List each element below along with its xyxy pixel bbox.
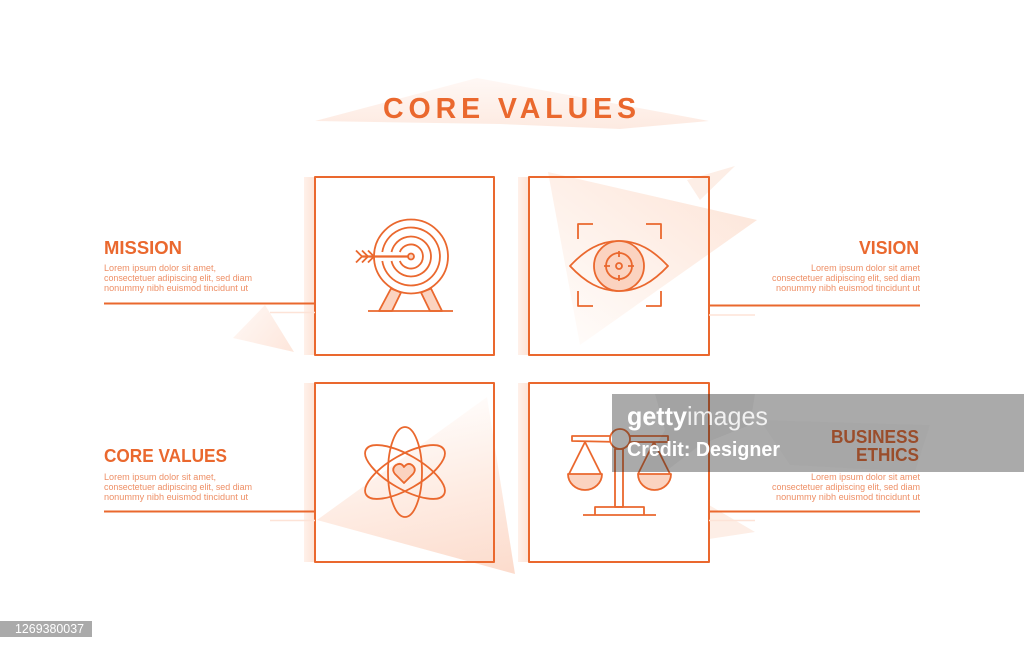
text block: core values: CORE VALUES bbox=[104, 446, 227, 466]
watermark credit: Credit: Designer bbox=[627, 439, 780, 461]
business ethics background triangle bbox=[709, 505, 755, 539]
text block: mission: nonummy nibh euismod tincidunt ut bbox=[104, 283, 248, 293]
text block: vision: VISION bbox=[859, 238, 919, 258]
icon: balance scale bbox=[568, 429, 671, 515]
text block: business ethics: ETHICS bbox=[856, 445, 919, 465]
panel: business ethics bbox=[529, 383, 709, 562]
title: CORE VALUES bbox=[383, 93, 641, 125]
vision background triangles bbox=[548, 166, 757, 345]
text block: vision: Lorem ipsum dolor sit amet bbox=[811, 263, 920, 273]
text block: business ethics bbox=[772, 427, 920, 502]
text block: core values bbox=[104, 446, 252, 502]
icon: eye with crosshair bbox=[570, 224, 668, 306]
text block: core values: consectetuer adipiscing elit, sed diam bbox=[104, 482, 252, 492]
text block: business ethics: BUSINESS bbox=[831, 427, 919, 447]
text block: business ethics: nonummy nibh euismod tincidunt ut bbox=[776, 492, 920, 502]
connector: mission bbox=[104, 304, 315, 312]
text block: mission: MISSION bbox=[104, 238, 182, 258]
icon: target with arrow bbox=[356, 220, 453, 311]
text block: mission bbox=[104, 238, 252, 293]
text block: mission: Lorem ipsum dolor sit amet, bbox=[104, 263, 216, 273]
mission background triangle bbox=[233, 305, 294, 352]
connector: business ethics bbox=[709, 512, 920, 520]
connector: vision bbox=[709, 306, 920, 315]
panel shadow bands bbox=[304, 177, 529, 562]
connector: core values bbox=[104, 512, 315, 520]
image id tag: 1269380037 bbox=[15, 621, 84, 636]
panel: core values bbox=[315, 383, 494, 562]
text block: core values: nonummy nibh euismod tincidunt ut bbox=[104, 492, 248, 502]
text block: vision: consectetuer adipiscing elit, sed diam bbox=[772, 273, 920, 283]
text block: vision bbox=[772, 238, 920, 293]
core values background triangle bbox=[317, 397, 515, 574]
text block: business ethics: Lorem ipsum dolor sit amet bbox=[811, 472, 920, 482]
icon: atom with heart bbox=[358, 427, 452, 517]
text block: business ethics: consectetuer adipiscing elit, sed diam bbox=[772, 482, 920, 492]
panel: vision bbox=[529, 177, 709, 355]
text block: mission: consectetuer adipiscing elit, sed diam bbox=[104, 273, 252, 283]
text block: vision: nonummy nibh euismod tincidunt ut bbox=[776, 283, 920, 293]
text block: core values: Lorem ipsum dolor sit amet, bbox=[104, 472, 216, 482]
watermark band bbox=[612, 394, 1024, 472]
watermark logo: gettyimages bbox=[627, 401, 768, 431]
panel: mission bbox=[315, 177, 494, 355]
title background shape bbox=[315, 78, 709, 129]
